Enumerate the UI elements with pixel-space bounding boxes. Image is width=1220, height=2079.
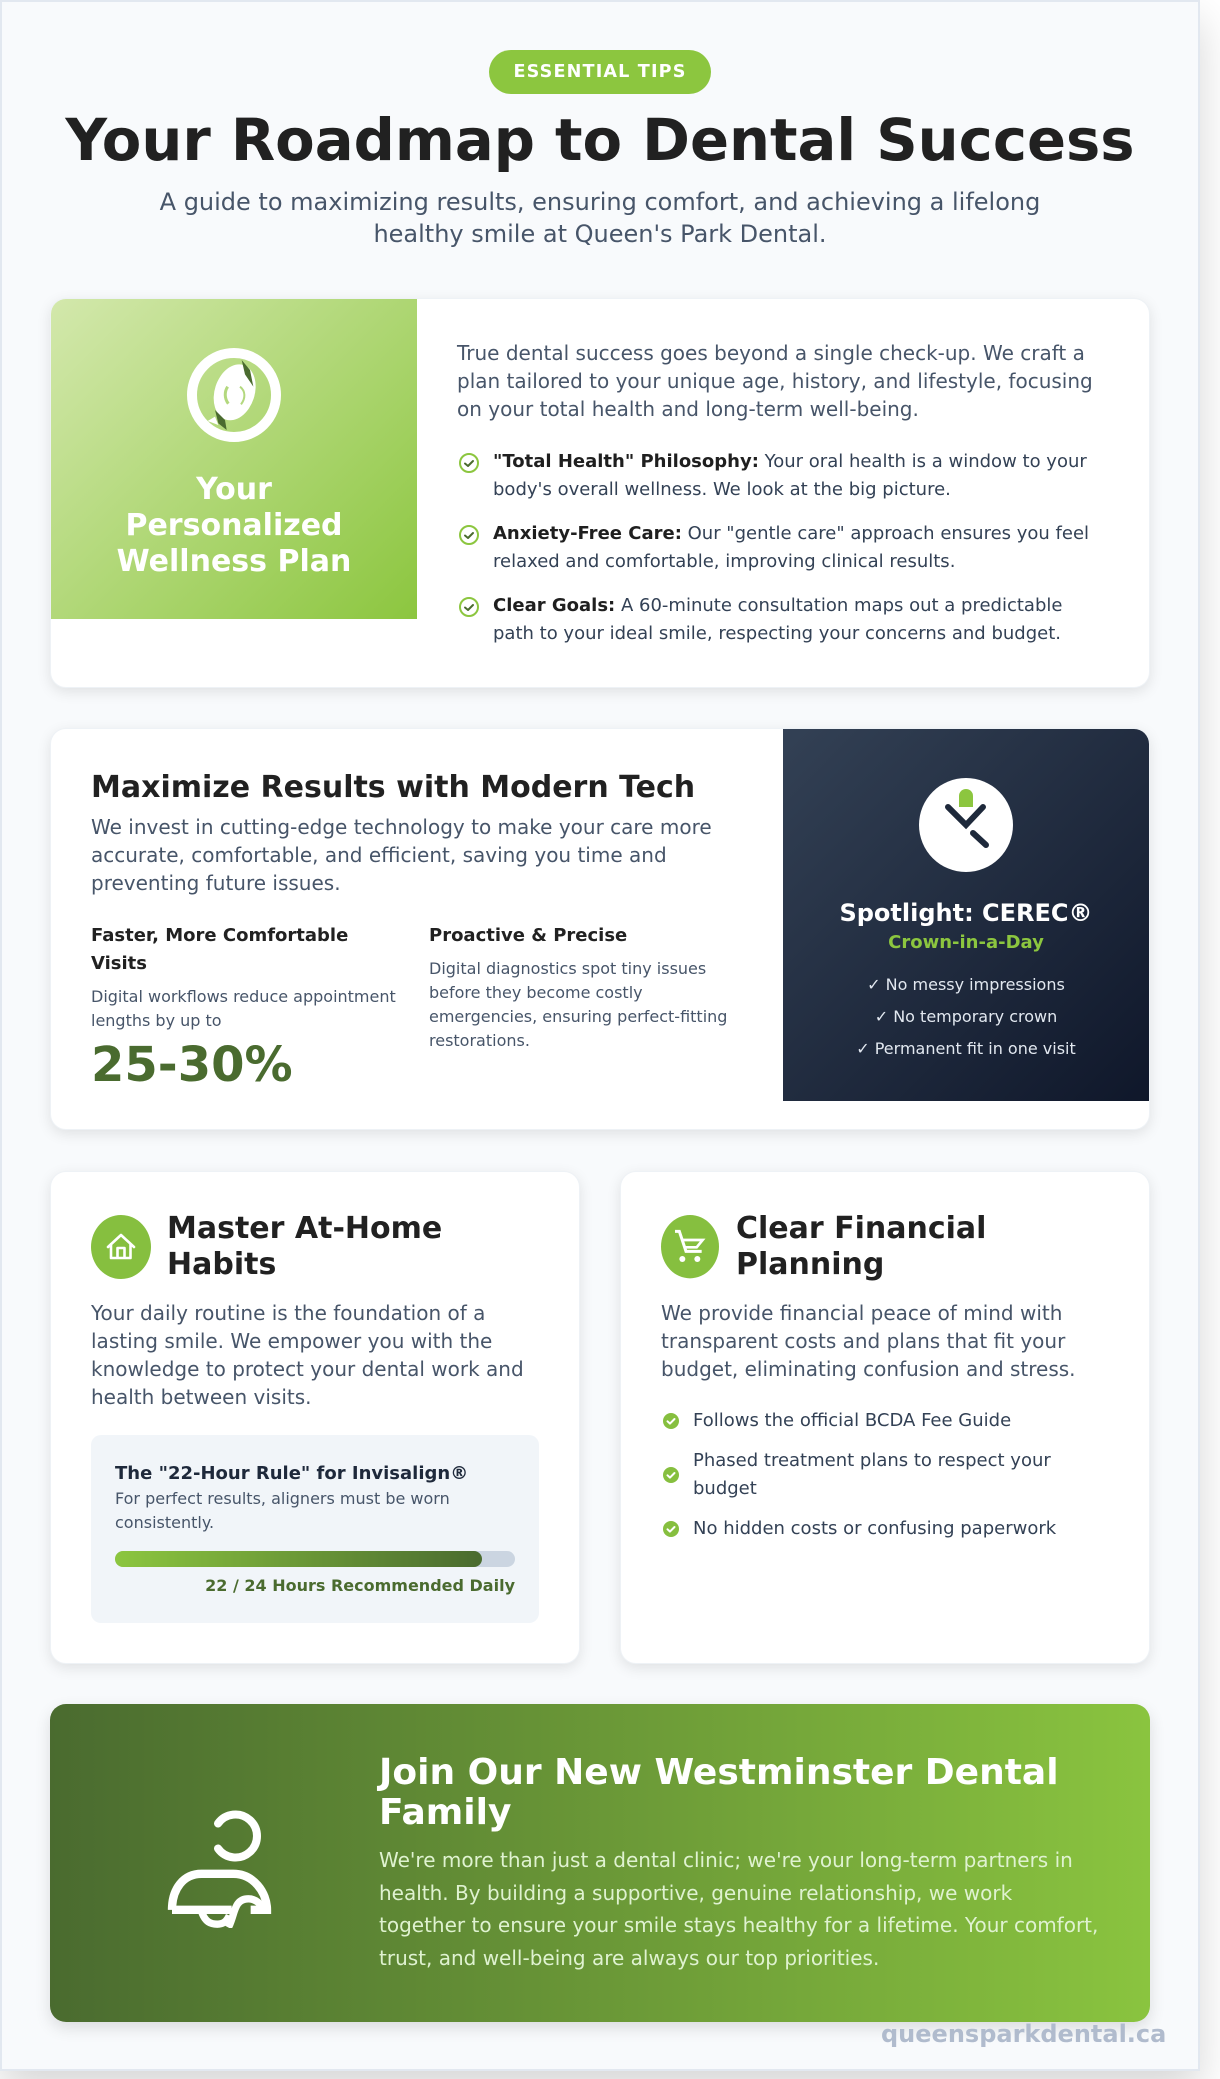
subtitle: healthy smile at Queen's Park Dental. [373,220,827,248]
spotlight list: ✓ No temporary crown [875,1007,1057,1026]
icon: check [459,597,479,617]
spotlight list: ✓ No messy impressions [867,975,1065,994]
text: proactive: emergencies, ensuring perfect-fitting [429,1007,727,1026]
spotlight heading: Spotlight: CEREC® [839,899,1093,927]
list item: total health: "Total Health" Philosophy: Your oral health is a window to your [493,451,1087,472]
intro text: plan tailored to your unique age, history, and lifestyle, focusing [457,369,1093,393]
text: at-home habits: health between visits. [91,1385,312,1409]
icon: check [459,453,479,473]
list item: no hidden costs: No hidden costs or confusing paperwork [693,1518,1056,1539]
list item: anxiety-free [493,523,1089,572]
hero heading [117,472,351,579]
text: financial planning [661,1301,1076,1381]
hero heading: Personalized [125,508,343,543]
column: proactive: Proactive & Precise [429,925,627,946]
callout: 22-hour rule [91,1435,539,1623]
panel: at-home habits [50,1171,580,1664]
progress fill [115,1551,482,1567]
icon: person with tooth [168,1810,272,1928]
hero heading: Your [196,472,272,507]
callout heading: The "22-Hour Rule" for Invisalign® [115,1463,468,1484]
list item: phased [693,1450,1051,1499]
banner text: together to ensure your smile stays healthy for a lifetime. Your comfort, [379,1913,1098,1937]
list: financial points: Follows the official BCDA Fee Guide [693,1410,1011,1431]
text: proactive: restorations. [429,1031,530,1050]
banner text [379,1848,1098,1970]
list item: total health [493,451,1087,500]
badge: essential tips: ESSENTIAL TIPS [513,62,687,82]
dome and inner curves [172,1874,267,1927]
list item: anxiety-free: relaxed and comfortable, improving clinical results. [493,551,955,572]
subtitle: A guide to maximizing results, ensuring comfort, and achieving a lifelong [160,188,1040,216]
hero heading: Wellness Plan [117,544,351,579]
title: Your Roadmap to Dental Success [65,107,1135,174]
column: faster visits: Faster, More Comfortable [91,925,348,946]
text: at-home habits: Your daily routine is the foundation of a [91,1301,485,1325]
callout text [115,1489,450,1532]
text: financial planning: budget, eliminating confusion and stress. [661,1357,1076,1381]
icon: cerec crown [919,778,1013,872]
list item: phased: budget [693,1478,757,1499]
text: faster visits: lengths by up to [91,1011,222,1030]
spotlight subheading: Crown-in-a-Day [888,932,1044,953]
subtitle [160,188,1040,248]
banner text: trust, and well-being are always our top priorities. [379,1946,879,1970]
spotlight list [856,975,1076,1058]
banner heading: Join Our New Westminster Dental [379,1752,1059,1793]
badge: essential tips [489,50,711,94]
wellness hero panel [51,299,417,619]
icon: check [459,525,479,545]
heading: financial planning: Planning [736,1247,884,1282]
progress label: 22 / 24 Hours Recommended Daily [205,1576,515,1595]
list item: phased: Phased treatment plans to respect your [693,1450,1051,1471]
panel: financial planning [620,1171,1150,1664]
text: financial planning: We provide financial peace of mind with [661,1301,1062,1325]
list item: clear goals: path to your ideal smile, respecting your concerns and budget. [493,623,1061,644]
text: modern tech intro: We invest in cutting-edge technology to make your care more [91,815,712,839]
text: proactive [429,959,727,1050]
banner heading: Family [379,1792,511,1833]
panel: modern tech [50,728,1150,1130]
heading: at-home habits: Habits [167,1247,276,1282]
text: modern tech intro: accurate, comfortable, and efficient, saving you time and [91,843,667,867]
heading: at-home habits [167,1211,442,1282]
intro text: on your total health and long-term well-being. [457,397,919,421]
callout text: consistently. [115,1512,214,1532]
banner heading [376,1752,1059,1833]
icon: check [663,1467,679,1483]
icon: home [91,1215,151,1279]
spotlight list: ✓ Permanent fit in one visit [856,1039,1076,1058]
heading: modern tech: Maximize Results with Modern Tech [91,770,695,805]
list item: total health: body's overall wellness. We look at the big picture. [493,479,951,500]
panel: join banner [50,1704,1150,2022]
text: at-home habits: knowledge to protect your dental work and [91,1357,524,1381]
list item: clear goals [493,595,1062,644]
text: financial planning: transparent costs and plans that fit your [661,1329,1065,1353]
spotlight background [783,729,1149,1101]
icon: check [663,1521,679,1537]
list item: anxiety-free: Anxiety-Free Care: Our "gentle care" approach ensures you feel [493,523,1089,544]
watermark url: queensparkdental.ca [881,2020,1166,2048]
text: modern tech intro: preventing future issues. [91,871,341,895]
text: at-home habits: lasting smile. We empower you with the [91,1329,492,1353]
banner text: health. By building a supportive, genuine relationship, we work [379,1881,1012,1905]
text: faster visits [91,987,396,1030]
heading: financial planning: Clear Financial [736,1211,986,1246]
text: modern tech intro [91,815,712,895]
text: faster visits: Digital workflows reduce appointment [91,987,396,1006]
column: faster visits: Visits [91,953,147,974]
icon: cart [661,1215,719,1278]
banner text: We're more than just a dental clinic; we're your long-term partners in [379,1848,1073,1872]
text: at-home habits [91,1301,524,1409]
icon: wellness ring and leaves [187,348,281,442]
intro text: True dental success goes beyond a single check-up. We craft a [457,341,1085,365]
icon: check [663,1413,679,1429]
column: faster visits [91,925,348,974]
text: proactive: before they become costly [429,983,643,1002]
heading: financial planning [736,1211,986,1282]
heading: at-home habits: Master At-Home [167,1211,442,1246]
callout text: For perfect results, aligners must be worn [115,1489,450,1508]
intro text [456,341,1093,421]
list item: clear goals: Clear Goals: A 60-minute consultation maps out a predictable [493,595,1062,616]
stat: 25-30%: 25-30% [91,1037,293,1093]
text: proactive: Digital diagnostics spot tiny issues [429,959,706,978]
panel: personalized wellness plan [50,298,1150,688]
progress bar [115,1551,515,1567]
